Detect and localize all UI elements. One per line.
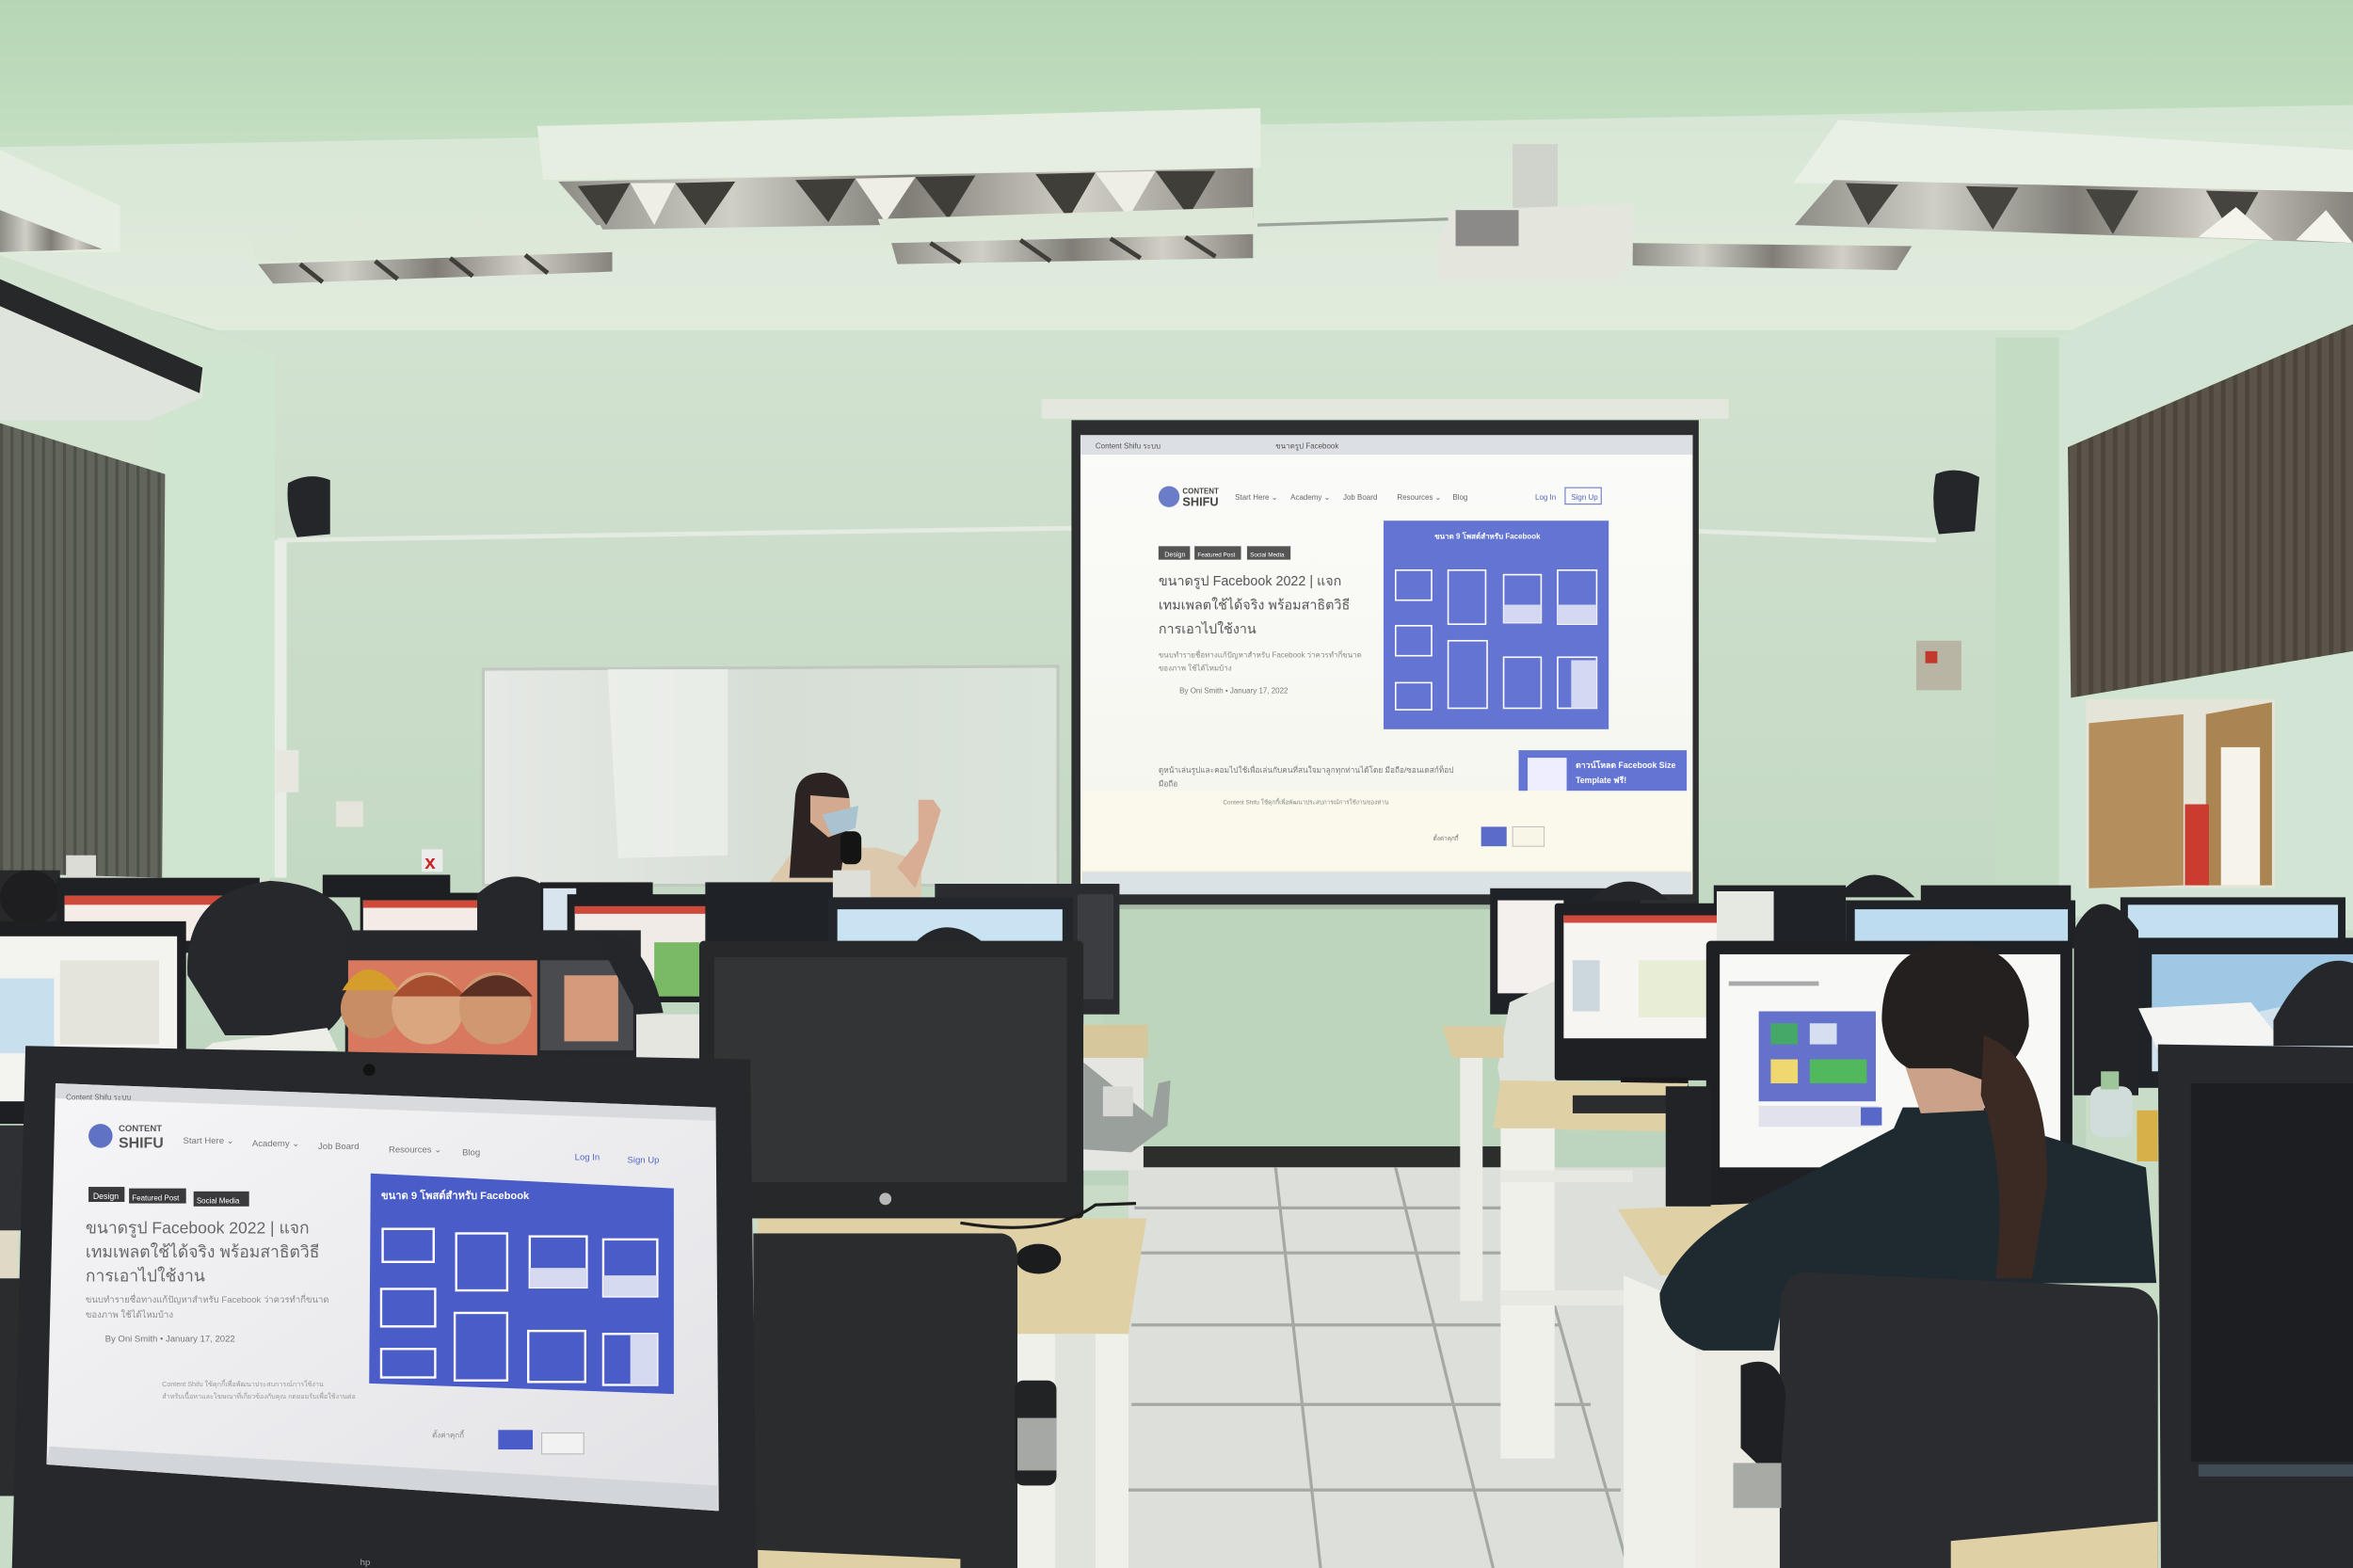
screen subtext: ของภาพ ใช้ได้ไหมบ้าง <box>1159 664 1232 673</box>
browser tabs <box>1080 435 1692 455</box>
right middle monitor <box>1555 891 1774 1098</box>
screen shadow lower wall <box>1071 904 1699 911</box>
ceiling light small left <box>252 225 616 283</box>
right foreground desk corner <box>1951 1522 2158 1568</box>
right foreground chair <box>1734 1272 2158 1568</box>
right desk upper <box>1442 1026 1689 1459</box>
student behind photoshop monitor <box>594 934 664 1015</box>
centre black back monitor <box>699 941 1083 1233</box>
screen tags <box>1159 546 1290 560</box>
screen login <box>1535 488 1601 504</box>
page buttons: ตั้งค่าคุกกี้ <box>432 1429 465 1439</box>
screen tags: Social Media <box>1250 552 1285 558</box>
page cookie text: Content Shifu ใช้คุกกี้เพื่อพัฒนาประสบการณ์การใช้งาน <box>162 1379 324 1388</box>
page nav: Job Board <box>318 1142 360 1152</box>
page nav: Blog <box>462 1148 480 1159</box>
right corner monitor <box>2138 937 2353 1088</box>
paper marker red x: x <box>424 852 436 873</box>
screen logo: CONTENT <box>1182 488 1219 496</box>
page nav: Resources ⌄ <box>389 1144 441 1155</box>
browser tab strip: Content Shifu ระบบ <box>66 1094 131 1102</box>
dark seated student head <box>187 881 357 1050</box>
page heading: การเอาไปใช้งาน <box>86 1266 205 1285</box>
ceiling <box>0 105 2353 342</box>
page nav: Log In <box>575 1152 600 1162</box>
foreground monitor <box>12 1046 757 1568</box>
screen blue banner <box>1519 750 1687 792</box>
speaker right <box>1933 471 1979 535</box>
screen nav: Resources ⌄ <box>1397 493 1441 502</box>
projector screen casing <box>1042 399 1729 419</box>
conduit <box>275 540 287 878</box>
photoshop monitor <box>341 930 641 1060</box>
screen heading: ขนาดรูป Facebook 2022 | แจก <box>1159 574 1341 589</box>
air conditioner <box>0 280 202 420</box>
left middle monitor <box>0 921 186 1124</box>
screen cookie bar: Content Shifu ใช้คุกกี้เพื่อพัฒนาประสบการณ์การใช้งานของท่าน <box>1223 798 1389 807</box>
student in black with ponytail <box>1659 942 2156 1351</box>
browser tab strip <box>56 1083 716 1121</box>
ceiling light small centre <box>878 207 1253 264</box>
page heading <box>86 1218 319 1285</box>
right side wall <box>2056 195 2353 930</box>
wall rail <box>278 528 1936 540</box>
page blue panel <box>369 1174 674 1394</box>
browser tabs: ขนาดรูป Facebook <box>1275 442 1338 452</box>
screen blue panel <box>1384 520 1609 729</box>
floor <box>1128 1167 1803 1568</box>
page buttons <box>432 1429 584 1454</box>
page nav: Sign Up <box>627 1156 659 1166</box>
screen taskbar <box>1082 872 1691 894</box>
right back row monitors <box>1490 874 2345 1096</box>
screen nav <box>1235 493 1467 502</box>
right window blinds <box>2068 324 2353 697</box>
left side wall <box>0 255 270 901</box>
page blue panel: ขนาด 9 โพสต์สำหรับ Facebook <box>381 1189 530 1202</box>
page tags: Social Media <box>197 1197 240 1206</box>
projector <box>1257 144 1633 280</box>
page heading: เทมเพลตใช้ได้จริง พร้อมสาธิตวิธี <box>86 1242 319 1261</box>
screen tags: Featured Post <box>1197 552 1236 558</box>
centre foreground desk <box>758 1204 1146 1568</box>
teacher <box>770 773 941 897</box>
left dark edge <box>0 1278 21 1496</box>
screen blue banner: ดาวน์โหลด Facebook Size <box>1576 760 1675 770</box>
screen cookie bar <box>1082 791 1691 871</box>
projector screen <box>1071 420 1699 904</box>
paper marker red x <box>422 849 442 873</box>
speaker left <box>287 476 330 537</box>
browser tabs: Content Shifu ระบบ <box>1096 442 1160 451</box>
screen nav: Academy ⌄ <box>1290 493 1330 502</box>
whiteboard <box>483 666 1058 886</box>
back centre monitor with photoshop app <box>828 884 1119 1015</box>
page logo: SHIFU <box>119 1136 164 1152</box>
left pillar <box>157 353 275 878</box>
page cookie text: สำหรับเนื้อหาและโฆษณาที่เกี่ยวข้องกับคุณ กดยอมรับเพื่อใช้งานต่อ <box>162 1391 356 1400</box>
screen tags: Design <box>1164 551 1186 558</box>
wall switch boxes <box>276 750 363 826</box>
page tags: Featured Post <box>132 1193 180 1202</box>
water bottle <box>2090 1071 2158 1161</box>
upper wall band <box>0 0 2353 165</box>
screen heading: เทมเพลตใช้ได้จริง พร้อมสาธิตวิธี <box>1159 597 1350 613</box>
monitor brand: hp <box>360 1558 370 1568</box>
left window blinds <box>0 424 165 878</box>
page nav: Academy ⌄ <box>252 1139 299 1149</box>
page logo: CONTENT <box>119 1124 162 1134</box>
screen logo <box>1159 487 1219 508</box>
ceiling light right large <box>1793 120 2353 243</box>
screen subtext: By Oni Smith • January 17, 2022 <box>1179 687 1289 696</box>
screen nav: Blog <box>1452 493 1467 502</box>
right side student <box>1497 978 1561 1141</box>
screen login: Sign Up <box>1571 493 1598 502</box>
page heading: ขนาดรูป Facebook 2022 | แจก <box>86 1218 310 1238</box>
page taskbar <box>46 1447 717 1511</box>
screen logo: SHIFU <box>1182 494 1219 508</box>
right pillar <box>1996 338 2059 893</box>
page tags <box>88 1187 249 1207</box>
page logo <box>88 1124 164 1152</box>
screen body lines: มือถือ <box>1159 778 1177 788</box>
right main monitor <box>1706 941 2073 1205</box>
screen blue panel: ขนาด 9 โพสต์สำหรับ Facebook <box>1434 531 1541 540</box>
screen nav: Start Here ⌄ <box>1235 493 1277 502</box>
right foreground monitor <box>2158 1045 2353 1568</box>
back left monitors row <box>0 856 871 1002</box>
page subtext: By Oni Smith • January 17, 2022 <box>105 1334 235 1344</box>
wall alarm box <box>1916 641 1961 690</box>
front desk edges <box>758 1550 960 1568</box>
ceiling light left edge <box>0 150 120 252</box>
ceiling light centre large <box>537 108 1260 230</box>
centre desk and student legs <box>1083 1025 1171 1171</box>
page cookie text <box>162 1379 356 1400</box>
screen cookie bar: ตั้งค่าคุกกี้ <box>1433 834 1460 842</box>
whiteboard reflection <box>608 669 728 858</box>
wall skirting <box>1111 1146 1530 1167</box>
screen subtext: ขนบทำรายชื่อทางแก้ปัญหาสำหรับ Facebook ว่าควรทำกี่ขนาด <box>1159 648 1362 659</box>
screen heading: การเอาไปใช้งาน <box>1159 621 1257 637</box>
page tags: Design <box>93 1192 119 1201</box>
page subtext: ขนบทำรายชื่อทางแก้ปัญหาสำหรับ Facebook ว่าควรทำกี่ขนาด <box>86 1293 329 1305</box>
left foreground paper <box>0 1219 18 1278</box>
page nav <box>184 1136 659 1166</box>
screen body lines: ดูหน้าเล่นรูปและคอมไปใช้เพื่อเล่นกับคนที่สนใจมาลูกทุกท่านได้โดย มือถือ/ซอนเดสก์ท็อป <box>1159 764 1454 776</box>
screen nav: Job Board <box>1343 493 1377 502</box>
centre foreground chair <box>753 1233 1056 1568</box>
door <box>2086 699 2275 888</box>
page subtext <box>86 1293 329 1344</box>
screen heading <box>1159 574 1350 637</box>
back wall <box>150 330 2086 1185</box>
right foreground desk <box>1618 1204 1789 1568</box>
page subtext: ของภาพ ใช้ได้ไหมบ้าง <box>86 1309 173 1320</box>
screen blue banner: Template ฟรี! <box>1576 776 1626 785</box>
lower back wall <box>1103 909 1500 1149</box>
page nav: Start Here ⌄ <box>184 1136 234 1146</box>
ceiling light small right <box>1633 243 1912 270</box>
black chair back monitor-side <box>1666 1086 1711 1207</box>
screen subtext <box>1159 648 1362 696</box>
screen body lines <box>1159 764 1454 788</box>
screen login: Log In <box>1535 493 1556 502</box>
